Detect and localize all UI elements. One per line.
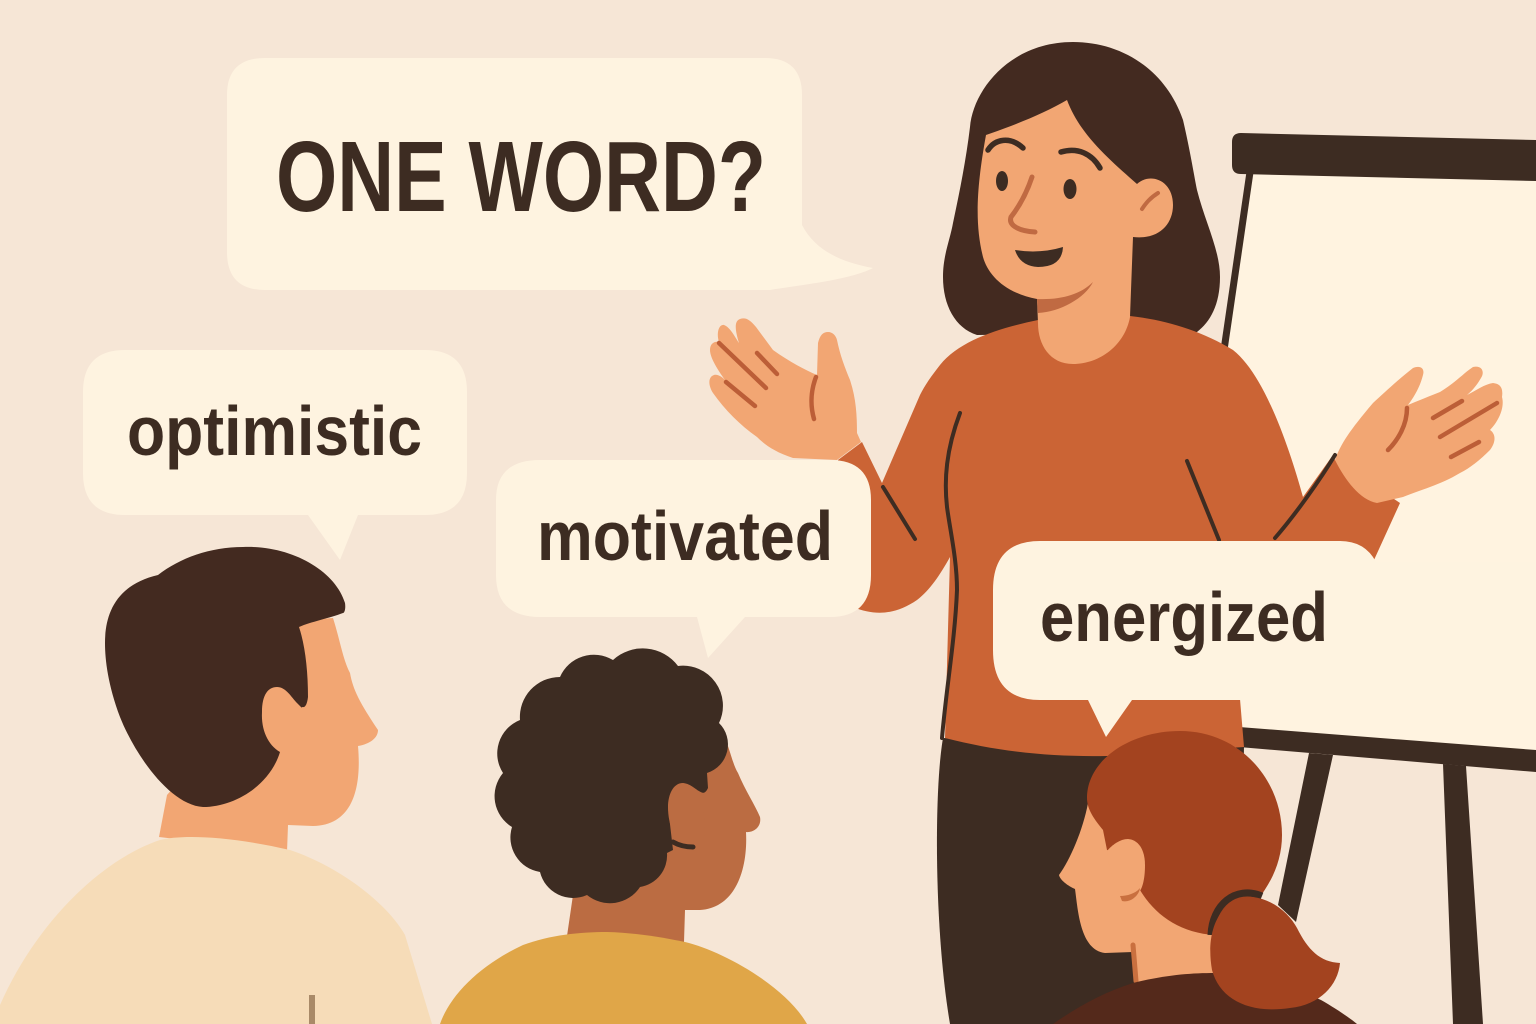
presenter sweater (838, 316, 1400, 756)
speech bubble: optimistic (83, 350, 467, 560)
shirt (440, 932, 807, 1024)
presenter hair (943, 42, 1220, 335)
hair (1087, 731, 1282, 935)
sweater fold lines (883, 413, 1335, 738)
right hand (1335, 367, 1503, 503)
hair (495, 648, 728, 903)
face and neck (159, 618, 378, 852)
speech bubble: energized: energized (1040, 578, 1328, 656)
right hand lines (1388, 401, 1497, 457)
ear (262, 687, 310, 760)
face and neck (567, 732, 760, 942)
flip chart paper (1222, 172, 1536, 751)
flip chart (1222, 133, 1536, 1024)
bottom bar (1239, 727, 1536, 772)
audience member: left (0, 547, 432, 1024)
heading: ONE WORD? (276, 121, 766, 233)
ear shadow (1120, 888, 1140, 901)
presenter (709, 42, 1503, 1024)
hair tie (1211, 893, 1262, 935)
presenter facial features (988, 140, 1158, 232)
speech bubble: ONE WORD? (227, 58, 873, 290)
presenter face and neck (978, 100, 1173, 364)
left hand lines (719, 343, 816, 419)
easel legs (1278, 753, 1483, 1024)
shirt (1053, 973, 1357, 1024)
hair (105, 547, 345, 807)
speech bubble: optimistic: optimistic (127, 392, 422, 470)
audience member: middle (440, 648, 807, 1024)
presenter trousers (937, 738, 1244, 1024)
ear (668, 783, 705, 850)
shirt (0, 837, 432, 1024)
neck line (1133, 945, 1136, 981)
left hand (709, 318, 861, 460)
speech bubble: motivated: motivated (537, 497, 833, 575)
ear (1107, 839, 1145, 900)
face and neck (1059, 803, 1215, 985)
ponytail (1210, 897, 1340, 1009)
audience member: right (1053, 731, 1357, 1024)
speech bubble: motivated (496, 460, 871, 658)
chin shadow (1037, 282, 1093, 313)
speech bubble: energized (993, 541, 1536, 737)
top bar (1232, 133, 1536, 181)
